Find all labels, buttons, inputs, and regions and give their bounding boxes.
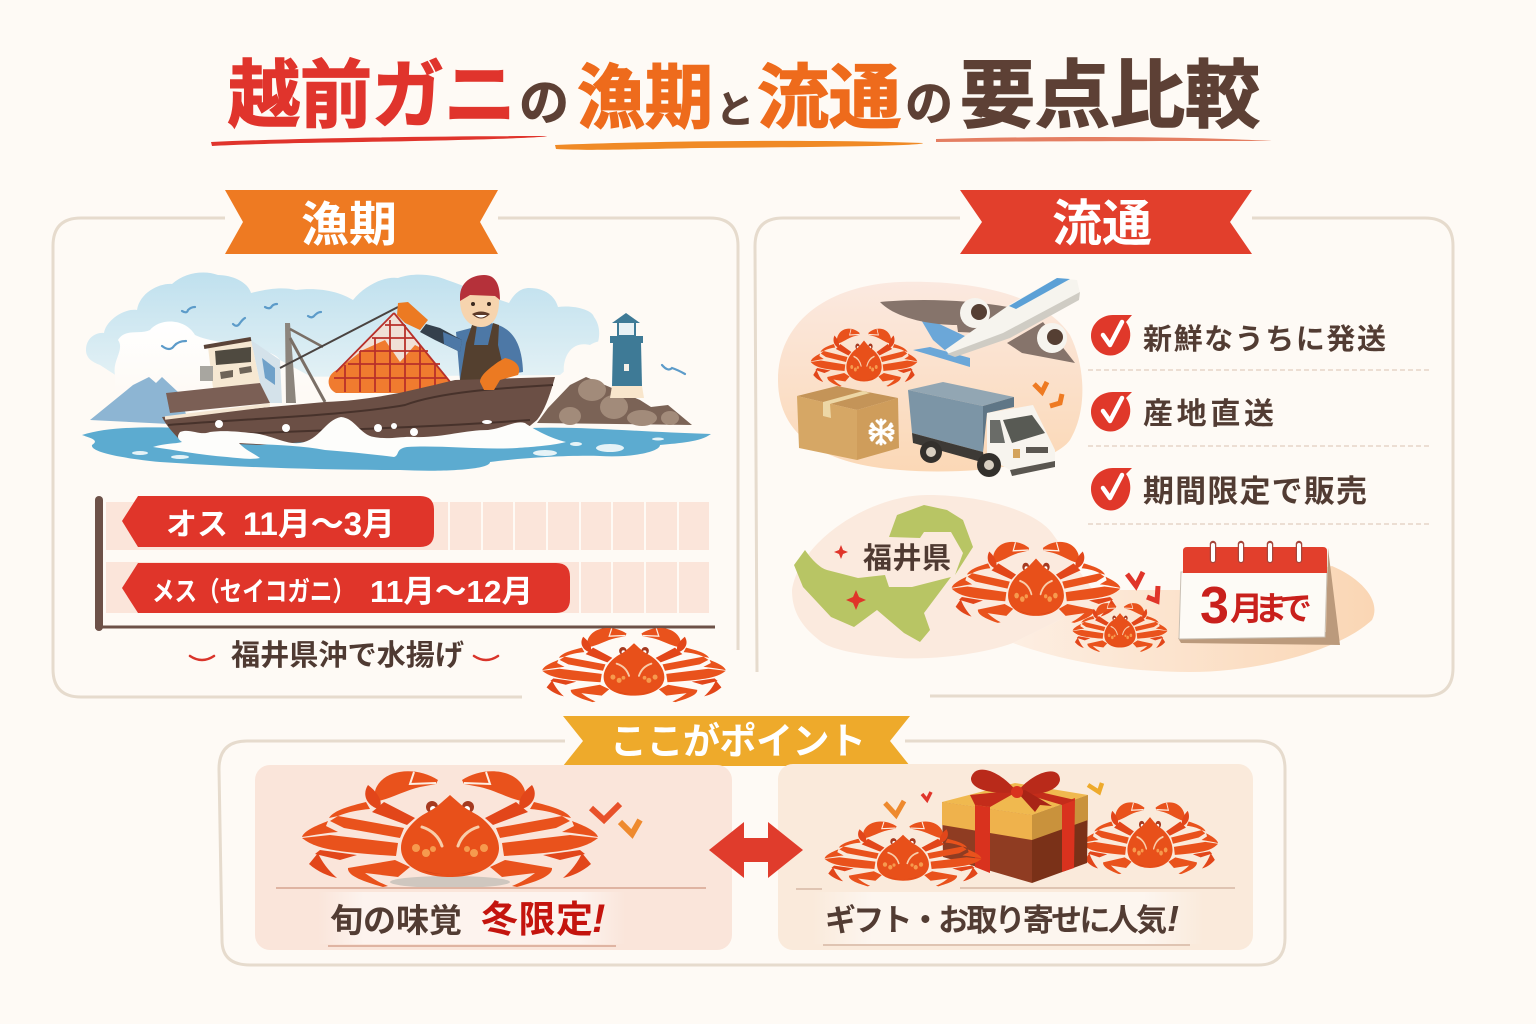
male season bar: 11月〜3月 <box>243 506 395 542</box>
rocks <box>537 377 692 425</box>
male season bar <box>122 496 434 547</box>
boat hull <box>162 377 555 445</box>
heading ribbon: fishing season <box>225 190 498 254</box>
title underlines <box>211 136 1273 150</box>
caption: landed off Fukui: 福井県沖で水揚げ <box>231 639 464 672</box>
glove on gunwale <box>480 358 519 390</box>
male season bar: オス <box>166 507 228 542</box>
card caption: 冬限定 <box>481 899 593 940</box>
title: の <box>905 78 953 131</box>
timeline chart <box>95 496 715 627</box>
female season bar: メス（セイコガニ） <box>152 577 355 607</box>
crab <box>811 329 917 386</box>
illustration: air and truck delivery <box>778 278 1082 477</box>
title: 漁期 <box>577 59 713 137</box>
icon: crab corner <box>542 628 726 702</box>
accent marks <box>1034 382 1062 406</box>
accent marks <box>591 804 620 820</box>
panel: distribution frame <box>755 218 1453 696</box>
calendar: 3 <box>1200 577 1229 635</box>
check item 2: 産地直送 <box>1143 398 1274 431</box>
check item 3: 期間限定で販売 <box>1143 474 1367 509</box>
birds <box>162 304 685 374</box>
left crab <box>825 821 981 886</box>
check item 1: 新鮮なうちに発送 <box>1143 323 1386 356</box>
crab net <box>329 313 451 393</box>
check item 3 <box>1091 468 1367 510</box>
heading ribbon: fishing season: 漁期 <box>301 199 397 252</box>
arrow: two-way comparison <box>709 822 803 878</box>
check item 2 <box>1091 392 1274 431</box>
plane <box>880 278 1080 367</box>
lighthouse <box>610 313 644 398</box>
white cloud <box>115 322 345 395</box>
axes <box>95 500 715 627</box>
title: 越前ガニ <box>228 54 516 137</box>
crabs <box>952 542 1120 623</box>
rope <box>280 307 398 368</box>
panel: fishing season frame <box>53 218 738 697</box>
card: seasonal winter taste <box>255 765 732 950</box>
card: gifts and mail order <box>778 764 1253 950</box>
wake <box>153 417 566 459</box>
mast <box>285 323 325 403</box>
accent marks <box>1127 572 1158 601</box>
calendar <box>1178 544 1340 645</box>
peach blob <box>778 282 1082 471</box>
title: と <box>716 90 754 132</box>
female season bar: 11月〜12月 <box>370 574 533 609</box>
title <box>228 54 1260 137</box>
right blob <box>1013 566 1374 672</box>
accent marks <box>885 801 904 815</box>
female season bar <box>122 563 570 613</box>
title: 要点比較 <box>960 54 1260 137</box>
title: の <box>519 75 569 131</box>
illustration: Fukui map and season end <box>792 495 1374 672</box>
heading ribbon: distribution: 流通 <box>1052 196 1152 252</box>
Fukui map <box>794 505 973 642</box>
card caption: ! <box>592 897 605 941</box>
sea <box>82 427 711 471</box>
heading ribbon: key points <box>563 716 910 766</box>
card caption <box>318 892 626 946</box>
truck <box>908 382 1055 477</box>
gift box <box>942 770 1088 883</box>
right crab <box>1082 802 1218 874</box>
title: 流通 <box>757 59 901 137</box>
card caption: ! <box>1167 898 1179 939</box>
calendar: 月まで <box>1230 590 1312 627</box>
heading ribbon: key points: ここがポイント <box>610 721 866 762</box>
cabin <box>166 339 282 413</box>
card caption <box>812 892 1204 945</box>
map label: 福井県 <box>863 542 951 575</box>
card caption: 旬の味覚 <box>330 902 462 939</box>
check item 1 <box>1091 315 1386 356</box>
left blob <box>792 495 1100 658</box>
month tracks <box>106 502 709 613</box>
checklist <box>1088 315 1430 524</box>
heading ribbon: distribution <box>960 190 1252 254</box>
large crab <box>302 771 598 888</box>
mountains <box>90 377 190 425</box>
fisherman <box>397 275 523 380</box>
illustration: fishing boat scene <box>82 272 711 471</box>
card caption: ギフト・お取り寄せに人気 <box>825 903 1167 938</box>
sky clouds <box>86 272 599 378</box>
cardboard box <box>797 386 899 460</box>
panel: point frame <box>219 741 1285 965</box>
